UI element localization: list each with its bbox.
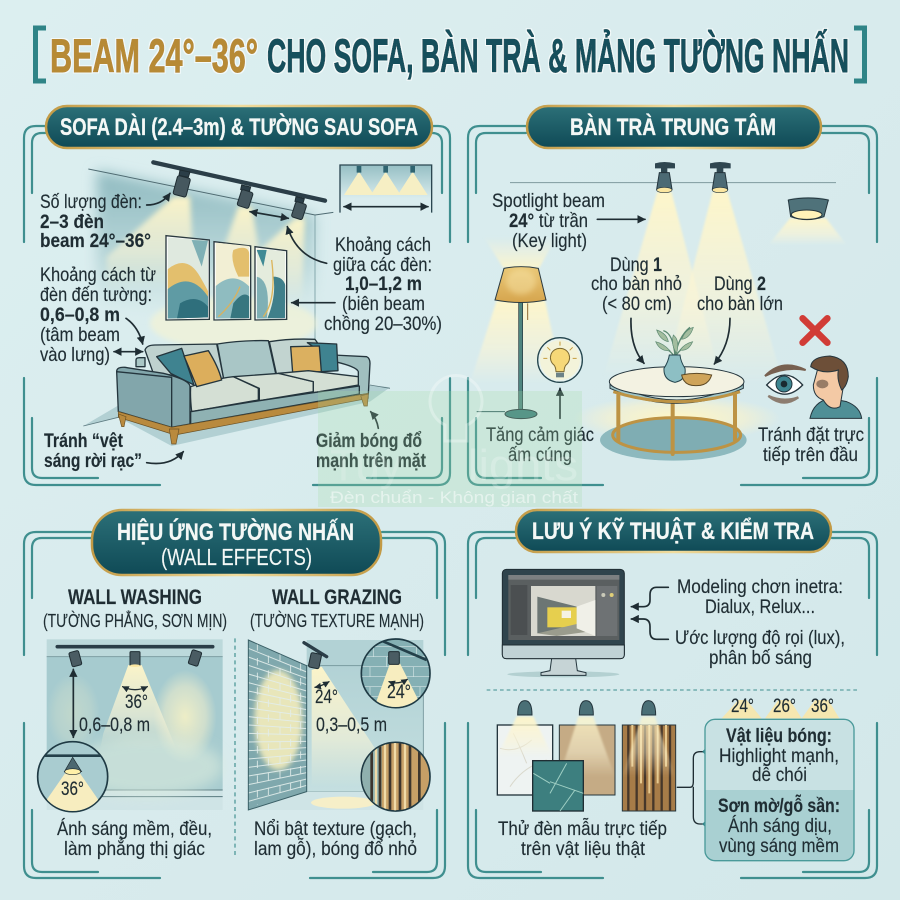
text: one spot for small table bbox=[591, 254, 682, 315]
text: lux estimate: Ước lượng độ rọi (lux), bbox=[675, 627, 845, 649]
eye icon bbox=[765, 365, 806, 403]
text: number of lights: Số lượng đèn: bbox=[40, 191, 142, 213]
panel frame bbox=[24, 126, 450, 485]
panel heading: BÀN TRÀ TRUNG TÂM bbox=[570, 113, 776, 141]
watermark: Tuy bbox=[330, 441, 402, 490]
text: modeling bbox=[677, 576, 843, 618]
inset: 36 degree lamp bbox=[35, 742, 110, 817]
red cross bbox=[803, 318, 827, 343]
text: spotlight: Spotlight beam bbox=[492, 190, 605, 212]
text: test on materials: Thử đèn mẫu trực tiếp bbox=[498, 817, 667, 840]
wood base bbox=[118, 393, 368, 435]
text: two spots for large table bbox=[697, 273, 783, 315]
washing caption bbox=[57, 817, 212, 860]
cosy bulb icon bbox=[538, 338, 582, 382]
text: spacing between lights: giữa các đèn: bbox=[333, 254, 432, 276]
text: number of lights: 2–3 đèn bbox=[40, 211, 104, 233]
panel: technical notes bbox=[468, 510, 877, 878]
text: reduce face shadows: mạnh trên mặt bbox=[316, 450, 426, 472]
wall washing heading: WALL WASHING bbox=[68, 586, 202, 609]
computer monitor bbox=[502, 569, 624, 677]
panel heading bbox=[516, 510, 831, 552]
text: distance to wall bbox=[40, 264, 156, 366]
watermark bbox=[318, 375, 582, 507]
wall paintings bbox=[166, 236, 287, 320]
panel: coffee table bbox=[468, 106, 877, 485]
spotlights bbox=[655, 162, 731, 193]
panel: sofa bbox=[24, 106, 450, 485]
material samples bbox=[497, 717, 676, 811]
panel heading: LƯU Ý KỸ THUẬT & KIỂM TRA bbox=[532, 517, 814, 545]
grazing caption: Nổi bật texture (gạch, bbox=[254, 818, 417, 840]
track light bbox=[153, 162, 325, 220]
wall grazing heading bbox=[250, 586, 424, 631]
text: one spot for small table: cho bàn nhỏ bbox=[591, 273, 682, 295]
grazing labels bbox=[315, 681, 411, 736]
text: reduce face shadows: Giảm bóng đổ bbox=[316, 430, 422, 452]
wall effects illustrations bbox=[35, 638, 430, 858]
panel heading: (WALL EFFECTS) bbox=[161, 544, 312, 570]
washing caption: Ánh sáng mềm, đều, bbox=[57, 817, 212, 840]
text: two spots for large table: cho bàn lớn bbox=[697, 293, 783, 315]
text: lux estimate bbox=[675, 627, 845, 669]
text: modeling: Dialux, Relux... bbox=[705, 596, 815, 618]
wall grazing heading: WALL GRAZING bbox=[272, 586, 402, 609]
text: avoid overhead: Tránh đặt trực bbox=[758, 424, 864, 446]
panel heading: HIỆU ỨNG TƯỜNG NHẤN bbox=[117, 518, 354, 546]
text: test on materials bbox=[498, 817, 667, 860]
text: spacing between lights: chồng 20–30%) bbox=[324, 313, 442, 335]
text: lux estimate: phân bố sáng bbox=[709, 647, 812, 669]
title gold part: BEAM 24°–36° bbox=[50, 29, 258, 82]
text: distance to wall: vào lưng) bbox=[40, 344, 110, 366]
text: spotlight bbox=[492, 190, 605, 252]
vase and plant bbox=[656, 327, 712, 386]
text: glossy material: Vật liệu bóng: bbox=[726, 725, 832, 747]
text: distance to wall: (tâm beam bbox=[40, 324, 120, 346]
divider bbox=[233, 638, 237, 858]
bracket bbox=[677, 748, 710, 828]
text: glossy material: Highlight mạnh, bbox=[719, 745, 839, 767]
material comparison box bbox=[705, 719, 854, 861]
washing labels: 36° bbox=[125, 691, 148, 713]
panel: wall effects bbox=[24, 510, 445, 878]
monitor callout arrows bbox=[631, 587, 668, 639]
text: cosy feeling: ấm cúng bbox=[508, 444, 572, 466]
grazing caption bbox=[254, 818, 417, 860]
text: matte material bbox=[718, 793, 840, 857]
table scene illustration bbox=[470, 162, 862, 461]
mini beam diagram bbox=[340, 165, 432, 213]
grazing labels: 24° bbox=[387, 681, 411, 703]
text: spacing between lights: Khoảng cách bbox=[335, 234, 431, 256]
wall shading bbox=[97, 171, 315, 330]
watermark: Đèn chuẩn - Không gian chất bbox=[330, 488, 578, 507]
panel frame bbox=[24, 532, 445, 878]
text: test on materials: trên vật liệu thật bbox=[521, 838, 646, 860]
brick glow bbox=[254, 670, 302, 770]
beams bbox=[470, 192, 847, 383]
ceiling line bbox=[510, 181, 836, 184]
text: reduce face shadows bbox=[316, 430, 426, 472]
washing labels: 0,6–0,8 m bbox=[79, 714, 150, 736]
text: cosy feeling: Tăng cảm giác bbox=[486, 424, 594, 446]
text: spacing between lights bbox=[324, 234, 442, 335]
panel frame bbox=[468, 532, 877, 878]
title left bracket bbox=[36, 28, 46, 81]
text: two spots for large table: Dùng 2 bbox=[714, 273, 766, 295]
sample lamps bbox=[518, 701, 656, 715]
arrows bbox=[560, 219, 730, 418]
text: number of lights bbox=[40, 191, 151, 252]
text: avoid patchy light: sáng rời rạc” bbox=[44, 450, 142, 472]
text: avoid overhead bbox=[758, 424, 864, 466]
panel heading bbox=[92, 510, 381, 575]
text: avoid patchy light bbox=[44, 430, 142, 472]
text: glossy material: dễ chói bbox=[752, 763, 807, 786]
beam angle tabs bbox=[722, 700, 839, 718]
text: one spot for small table: Dùng 1 bbox=[610, 254, 662, 276]
seat cushions bbox=[190, 377, 258, 412]
technical illustrations bbox=[487, 569, 858, 861]
floor lamp bbox=[477, 267, 546, 419]
panel heading bbox=[527, 106, 821, 148]
text: spacing between lights: (biên beam bbox=[342, 293, 425, 315]
text: matte material: Sơn mờ/gỗ sần: bbox=[718, 793, 840, 817]
person icon bbox=[810, 356, 862, 418]
sofa arm bbox=[117, 367, 190, 427]
grazing labels: 0,3–0,5 m bbox=[316, 714, 387, 736]
text: avoid overhead: tiếp trên đầu bbox=[763, 444, 858, 466]
text: one spot for small table: (< 80 cm) bbox=[602, 293, 672, 315]
title right bracket bbox=[854, 28, 864, 81]
title bbox=[36, 28, 864, 82]
beam angle labels: 36° bbox=[811, 695, 834, 717]
beam angle labels: 24° bbox=[731, 695, 754, 717]
text: number of lights: beam 24°–36° bbox=[40, 230, 151, 252]
dashed separator bbox=[487, 688, 858, 691]
washing labels bbox=[61, 691, 150, 800]
sofa bbox=[83, 339, 390, 446]
coffee table bbox=[600, 367, 747, 461]
text: spotlight: (Key light) bbox=[512, 230, 587, 252]
text: matte material: vùng sáng mềm bbox=[719, 835, 839, 857]
text: avoid patchy light: Tránh “vệt bbox=[44, 430, 123, 452]
arrows bbox=[114, 193, 378, 464]
grazing labels: 24° bbox=[315, 686, 338, 708]
sofa room illustration bbox=[83, 162, 432, 464]
grazing caption: lam gỗ), bóng đổ nhỏ bbox=[254, 837, 417, 860]
pillows bbox=[157, 348, 194, 385]
text: distance to wall: 0,6–0,8 m bbox=[40, 304, 120, 326]
text: distance to wall: Khoảng cách từ bbox=[40, 264, 156, 286]
text: distance to wall: đèn đến tường: bbox=[40, 284, 152, 306]
text: modeling: Modeling chơn inetra: bbox=[677, 576, 843, 598]
washing caption: làm phẳng thị giác bbox=[64, 836, 205, 860]
floor shadow bbox=[83, 385, 390, 446]
text: spacing between lights: 1,0–1,2 m bbox=[345, 273, 422, 295]
brick pattern bbox=[248, 648, 307, 801]
wall washing heading bbox=[43, 586, 227, 631]
light beams bbox=[107, 197, 317, 350]
panel frame bbox=[468, 126, 877, 485]
inset: wood slats bbox=[361, 742, 430, 812]
text: spotlight: 24° từ trần bbox=[509, 210, 588, 232]
beam angle labels: 26° bbox=[773, 695, 796, 717]
text: glossy material bbox=[719, 725, 839, 786]
text: matte material: Ánh sáng dịu, bbox=[728, 814, 832, 837]
panel heading: SOFA DÀI (2.4–3m) & TƯỜNG SAU SOFA bbox=[60, 113, 418, 141]
inset: brick and 24 degree lamp bbox=[361, 639, 430, 710]
washing labels: 36° bbox=[61, 778, 84, 800]
wall grazing scene bbox=[248, 640, 423, 810]
arrows and angle marks bbox=[73, 669, 407, 737]
wall washing scene bbox=[47, 639, 223, 810]
downlight bbox=[787, 197, 829, 220]
panel heading bbox=[46, 106, 432, 148]
watermark: lights bbox=[468, 441, 578, 490]
beam angle labels bbox=[731, 695, 834, 717]
text: cosy feeling bbox=[486, 424, 594, 466]
wall grazing heading: (TƯỜNG TEXTURE MẠNH) bbox=[250, 610, 424, 631]
wall washing heading: (TƯỜNG PHẲNG, SƠN MỊN) bbox=[43, 610, 227, 631]
